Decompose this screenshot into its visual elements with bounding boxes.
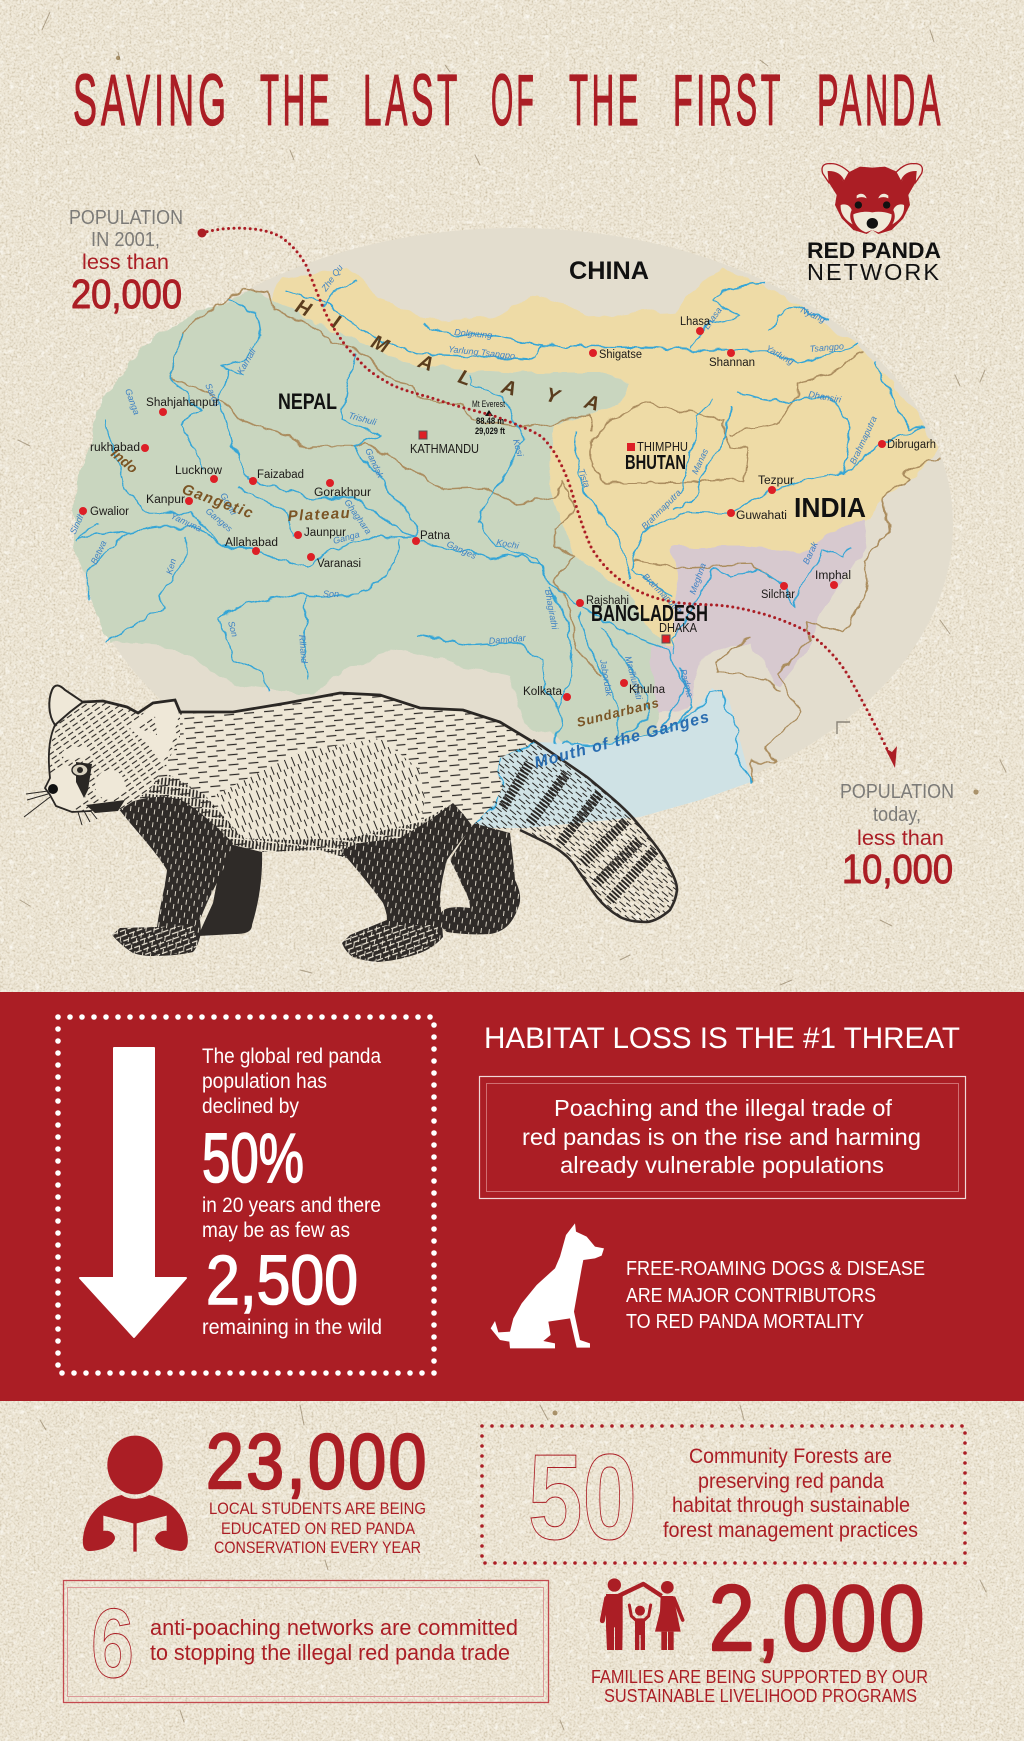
map: river names: Brahmaputra <box>639 488 683 531</box>
map: river names: Ken <box>164 557 178 576</box>
map: cities: KATHMANDU <box>410 441 479 456</box>
callout: population today: today, <box>873 804 921 826</box>
map: cities: Tezpur <box>758 475 794 487</box>
map: Himalaya lettering <box>292 295 602 416</box>
decline text: remaining in the wild <box>202 1316 382 1339</box>
title: SAVING <box>73 61 230 141</box>
decline text: 50% <box>202 1119 304 1197</box>
map: river names: Son <box>323 589 339 599</box>
map: Himalaya lettering: H <box>292 295 315 322</box>
map: Himalaya lettering: A <box>581 391 602 416</box>
map: yellow highlands region <box>274 267 938 652</box>
callout: population in 2001: IN 2001, <box>91 229 160 251</box>
icon: family <box>602 1578 683 1650</box>
map: cities: Allahabad <box>225 537 278 549</box>
map: cities: Guwahati <box>736 510 787 522</box>
icon: student reading <box>83 1436 188 1552</box>
map: river names: Bhagirathi <box>543 589 560 631</box>
forests text <box>663 1445 918 1542</box>
stat: 2,000: 2,000 <box>709 1566 927 1670</box>
map: river names: Yamuna <box>169 511 203 534</box>
map: river names: Ghaghara <box>342 497 374 536</box>
map: cities: Khulna <box>629 684 666 696</box>
map: region labels: CHINA <box>569 257 649 285</box>
body <box>120 693 533 860</box>
map: grey surrounding land <box>77 228 953 822</box>
map: river names: Sarda <box>203 382 222 408</box>
families caption <box>591 1667 928 1706</box>
decline text: population has <box>202 1070 327 1093</box>
map: purple region <box>647 518 869 713</box>
decline text: 2,500 <box>206 1241 358 1319</box>
map: river names: Kosi <box>511 438 526 458</box>
heading: habitat loss: HABITAT LOSS IS THE #1 THREAT <box>484 1022 960 1055</box>
map: cities: Lhasa <box>680 316 711 328</box>
students caption: EDUCATED ON RED PANDA <box>221 1519 416 1538</box>
decline text: may be as few as <box>202 1219 350 1242</box>
paws <box>112 925 438 962</box>
map: river names: Damodar <box>488 633 527 646</box>
panel: students <box>83 1417 429 1557</box>
callout: population in 2001 <box>69 207 183 317</box>
map: region labels: BANGLADESH <box>591 600 708 626</box>
map: borders <box>170 290 941 782</box>
map: plain labels: Sundarbans <box>575 695 660 730</box>
map: river names: Dolgxung <box>454 327 493 340</box>
callout: population today <box>840 781 954 892</box>
stat: 50 outlined: 50 <box>528 1429 637 1565</box>
map: cities: Shigatse <box>599 349 642 361</box>
map: cities: Shannan <box>709 357 755 369</box>
map: region labels: BHUTAN <box>625 452 686 474</box>
students caption <box>209 1499 426 1557</box>
panel: poaching <box>480 1076 966 1198</box>
forests text: preserving red panda <box>698 1470 884 1493</box>
map: river names: Meghna <box>687 562 708 596</box>
map: river names: Tsangpo <box>809 341 844 354</box>
map: cities: rukhabad <box>90 442 140 454</box>
callout: population in 2001: POPULATION <box>69 207 183 229</box>
map: Himalaya lettering: M <box>368 331 393 359</box>
panel: poaching: Poaching and the illegal trade of <box>554 1095 893 1121</box>
dogs text: TO RED PANDA MORTALITY <box>626 1311 864 1333</box>
map: plain labels: Plateau <box>287 505 350 525</box>
callout: population today: POPULATION <box>840 781 954 803</box>
map: river names: Brahmaputra <box>641 571 684 615</box>
whiskers <box>24 791 97 825</box>
families caption: FAMILIES ARE BEING SUPPORTED BY OUR <box>591 1667 928 1687</box>
title <box>73 61 944 141</box>
map: river names: Zhe Qu <box>319 263 345 294</box>
map: river names: Lhasa <box>701 305 724 331</box>
decline text: in 20 years and there <box>202 1194 381 1217</box>
map: cities: Kolkata <box>523 686 563 698</box>
callout: population in 2001: 20,000 <box>71 271 182 317</box>
map: cities: Kanpur <box>146 494 185 506</box>
map: Himalaya lettering: A <box>414 350 436 376</box>
map: Himalaya lettering: A <box>498 376 519 401</box>
map: Himalaya lettering: Y <box>543 384 563 409</box>
map: green lowlands region <box>75 290 667 745</box>
decline text <box>202 1045 382 1339</box>
map: Mt Everest marker: Mt Everest <box>472 399 505 409</box>
map: river names: Karnali <box>235 346 258 376</box>
tail <box>453 722 677 922</box>
title: FIRST <box>673 61 784 141</box>
map: river names: Sindh <box>68 511 87 536</box>
arrow: downward decline <box>80 1048 186 1337</box>
map: river names: Nyang <box>799 305 827 325</box>
map: river names: Dhansiri <box>808 389 843 405</box>
callout: population today: 10,000 <box>842 846 953 892</box>
title: OF <box>491 61 537 141</box>
map: cities: Gorakhpur <box>314 487 371 499</box>
map: region labels <box>278 257 866 626</box>
arrow: dotted population decline path <box>198 228 897 768</box>
map: region labels: NEPAL <box>278 389 337 414</box>
map: cities: Gwalior <box>90 506 129 518</box>
stat: 23,000: 23,000 <box>206 1417 429 1505</box>
map: cities: Patna <box>420 530 451 542</box>
map: plain labels: Gangetic <box>180 481 256 522</box>
anti-poaching text <box>150 1615 518 1665</box>
panel: families <box>591 1566 928 1706</box>
map: cities: Dibrugarh <box>887 439 936 451</box>
title: LAST <box>363 61 461 141</box>
logo icon: panda face <box>822 164 922 234</box>
map: cities: Lucknow <box>175 465 223 477</box>
map: river names: Ganga <box>332 529 361 546</box>
logo wordmark: RED PANDA <box>807 238 941 263</box>
map: Himalaya lettering: I <box>329 311 343 334</box>
map: cities: Faizabad <box>257 469 304 481</box>
map: cities: DHAKA <box>659 620 697 635</box>
map: cities: Silchar <box>761 589 795 601</box>
map label: Mouth of the Ganges: Mouth of the Ganges <box>533 709 711 772</box>
map: river names: Ganges <box>204 506 235 534</box>
map: river names: Barak <box>801 540 820 566</box>
near legs <box>112 797 473 962</box>
map: region labels: INDIA <box>794 492 866 523</box>
panel: anti-poaching networks <box>64 1580 548 1702</box>
forests text: habitat through sustainable <box>672 1494 910 1517</box>
far legs <box>198 823 520 936</box>
panel: poaching: already vulnerable populations <box>560 1152 884 1178</box>
families caption: SUSTAINABLE LIVELIHOOD PROGRAMS <box>604 1686 917 1706</box>
map: river names <box>68 263 879 701</box>
map: rivers <box>75 280 925 828</box>
map: river names: Betwa <box>89 539 108 566</box>
map: river names: Kochi <box>496 537 521 551</box>
map: river names: Ganges <box>445 539 478 561</box>
forests text: Community Forests are <box>689 1445 892 1468</box>
map: cities <box>79 316 936 701</box>
logo: Red Panda Network: NETWORK <box>807 259 941 285</box>
title: THE <box>260 61 333 141</box>
map: river names: Gandak <box>363 447 386 480</box>
illustration: engraved red panda <box>24 685 677 962</box>
panel: threats band <box>0 992 1024 1401</box>
map: Himalaya lettering: L <box>455 366 474 391</box>
anti-poaching text: anti-poaching networks are committed <box>150 1615 518 1640</box>
map: plain labels: Indo <box>108 445 141 477</box>
map: cities: THIMPHU <box>637 439 688 454</box>
dogs text: FREE-ROAMING DOGS & DISEASE <box>626 1258 925 1280</box>
panel: community forests <box>482 1426 965 1565</box>
map: river names: Trishuli <box>347 410 378 428</box>
map: river names: Madhumati <box>623 655 645 701</box>
map: cities: Imphal <box>815 570 851 582</box>
map: Mt Everest marker: 29,029 ft <box>475 426 505 436</box>
map of the red panda range <box>68 228 953 828</box>
students caption: LOCAL STUDENTS ARE BEING <box>209 1499 426 1518</box>
map: river names: Yarlung Tsangpo <box>448 344 516 361</box>
map: river names: Manas <box>690 447 710 476</box>
map: river names: Padma <box>678 668 695 698</box>
map: river names: Gomti <box>218 491 239 518</box>
dogs text: ARE MAJOR CONTRIBUTORS <box>626 1285 876 1307</box>
map: river names: Rihand <box>297 634 310 665</box>
forests text: forest management practices <box>663 1519 918 1542</box>
panel: poaching: red pandas is on the rise and harming <box>522 1124 921 1150</box>
map: river names: Ganga <box>123 387 142 416</box>
map: river names: Yarlung <box>764 343 795 367</box>
map: cities: Jaunpur <box>304 527 346 539</box>
callout: population today: less than <box>857 827 944 850</box>
map: river names: Son <box>226 620 240 638</box>
callout: population in 2001: less than <box>82 251 169 274</box>
map: cities: Rajshahi <box>586 595 629 607</box>
stat: 6 outlined: 6 <box>91 1588 134 1698</box>
head <box>45 685 533 813</box>
decline text: declined by <box>202 1095 299 1118</box>
chest and belly shading <box>130 775 470 860</box>
panel: decline statistics <box>58 1017 960 1373</box>
map: plain labels <box>108 445 660 730</box>
anti-poaching text: to stopping the illegal red panda trade <box>150 1640 510 1665</box>
logo: Red Panda Network <box>807 164 941 285</box>
map: coloured regions <box>75 267 938 745</box>
title: THE <box>569 61 642 141</box>
map: river names: Jabordak <box>598 658 614 697</box>
map: blue bay <box>470 688 751 828</box>
map: Mt Everest marker: 88.48 m <box>476 416 504 426</box>
map: Mt Everest marker <box>472 399 505 436</box>
map: river names: Tista <box>576 467 592 489</box>
decline text: The global red panda <box>202 1045 381 1068</box>
students caption: CONSERVATION EVERY YEAR <box>214 1538 421 1557</box>
map: river names: Brahmaputra <box>848 414 879 466</box>
map: cities: Varanasi <box>317 558 361 570</box>
dogs text <box>626 1258 925 1333</box>
map: cities: Shahjahanpur <box>146 397 219 409</box>
icon: sitting dog <box>491 1223 604 1348</box>
